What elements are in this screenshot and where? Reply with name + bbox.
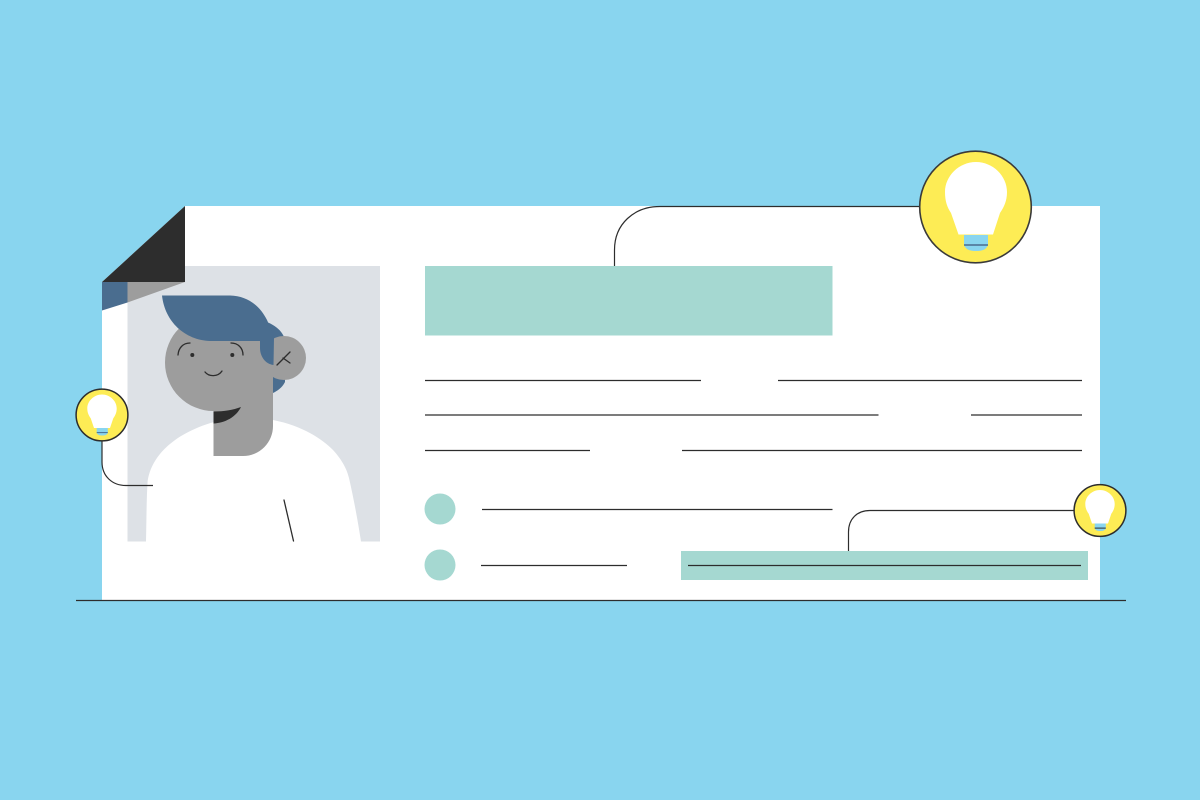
panel: portrait background	[128, 266, 380, 542]
icon: folded page corner	[102, 206, 185, 310]
text block: body lines	[425, 380, 1082, 450]
icon: right light bulb	[1074, 485, 1126, 536]
panel: resume paper	[102, 206, 1100, 600]
list item two	[424, 550, 627, 580]
icon: left light bulb	[76, 389, 128, 441]
highlighted line	[681, 551, 1088, 580]
eyes	[190, 353, 234, 357]
connector: highlight to right bulb	[848, 510, 1074, 551]
face details	[178, 343, 294, 541]
head and neck	[165, 314, 273, 456]
connector: portrait to left bulb	[102, 441, 153, 486]
ground line	[76, 600, 1126, 602]
portrait: person	[146, 296, 361, 542]
connector: heading to large bulb	[614, 206, 920, 266]
chin shadow	[214, 407, 241, 424]
list item one	[424, 494, 832, 524]
body: white shirt	[146, 420, 361, 542]
heading block	[425, 266, 832, 336]
ear	[262, 336, 306, 380]
hair: front	[162, 296, 274, 365]
hair: back	[255, 318, 285, 393]
icon: large light bulb	[920, 151, 1031, 263]
